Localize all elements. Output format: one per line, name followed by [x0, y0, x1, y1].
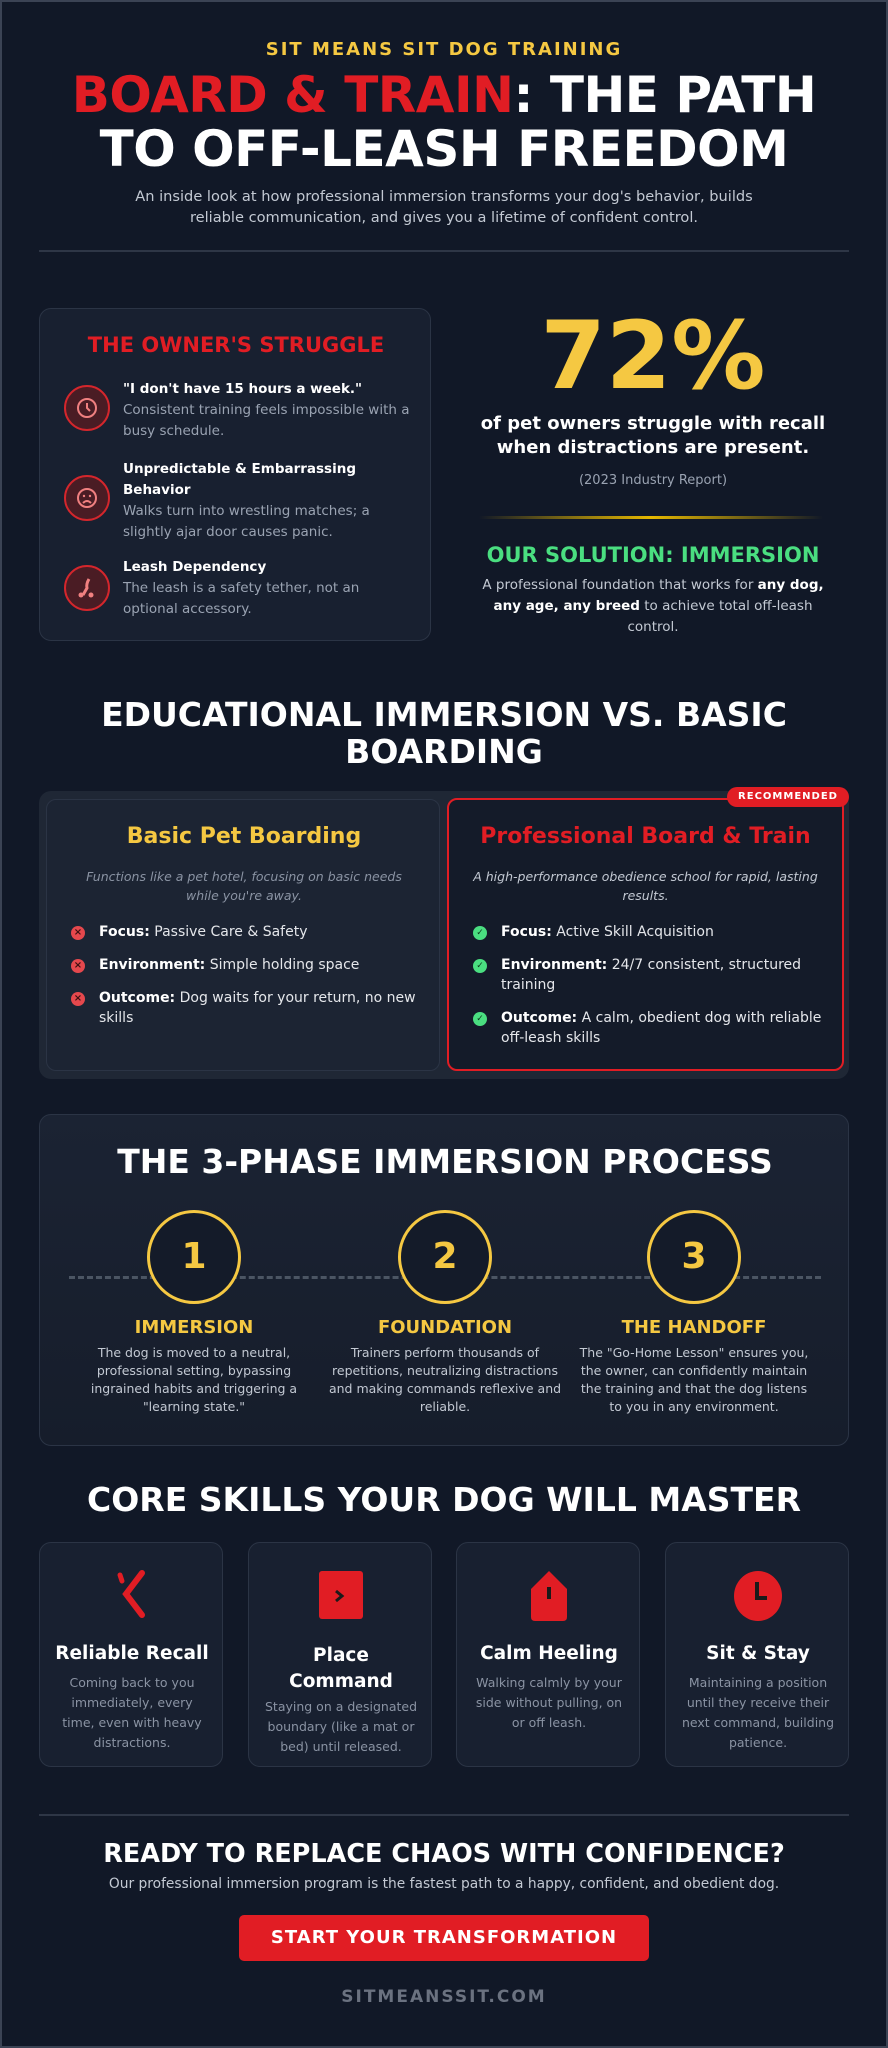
panel: 3-phase process [39, 1114, 849, 1446]
phase 3: THE HANDOFF [622, 1317, 766, 1338]
card: basic boarding: Outcome: Dog waits for your return, no new skills [99, 990, 416, 1026]
icon: leash [64, 565, 110, 611]
card: professional board & train: A high-performance obedience school for rapid, lasting results. [473, 869, 818, 903]
item 1 [64, 381, 410, 439]
badge: recommended [727, 787, 849, 807]
icon: clock [734, 1571, 782, 1621]
process heading: THE 3-PHASE IMMERSION PROCESS [117, 1142, 773, 1181]
card: professional board & train: Professional Board & Train [480, 824, 811, 849]
skill card: sit & stay: Maintaining a position until they receive their next command, building patience. [682, 1675, 834, 1750]
phase 3 [580, 1210, 808, 1414]
phase 1 [91, 1210, 297, 1414]
card: professional board & train: Focus: Active Skill Acquisition [501, 924, 714, 940]
card: professional board & train: ✓ [476, 1014, 484, 1024]
card: basic boarding: × [74, 960, 82, 971]
phase 2: Trainers perform thousands of repetitions, neutralizing distractions and making commands reflexive and reliable. [329, 1345, 561, 1414]
stat: 72%: 72% [540, 302, 766, 411]
icon: clock [64, 385, 110, 431]
skill card: place: Place [313, 1645, 369, 1666]
skill card: heeling: Calm Heeling [480, 1643, 618, 1664]
skill card: recall [39, 1542, 223, 1767]
card: professional board & train: ✓ [476, 928, 484, 938]
panel: comparison [39, 791, 849, 1079]
item 1: "I don't have 15 hours a week." [123, 381, 362, 397]
phase 2: 2 [432, 1236, 458, 1277]
card: basic boarding: × [74, 927, 82, 938]
solution text: A professional foundation that works for any dog, any age, any breed to achieve total off-leash control. [482, 577, 824, 635]
panel: owner's struggle [39, 308, 431, 641]
skill card: recall: Coming back to you immediately, every time, even with heavy distractions. [62, 1675, 202, 1750]
card: basic boarding [46, 799, 440, 1071]
icon: tag [531, 1571, 567, 1621]
item 2: Unpredictable & Embarrassing Behavior [123, 461, 356, 498]
card: basic boarding: Environment: Simple holding space [99, 957, 359, 973]
card: professional board & train: Environment: 24/7 consistent, structured training [501, 957, 801, 993]
phase 2: FOUNDATION [378, 1317, 512, 1338]
skill card: sit & stay: Sit & Stay [706, 1643, 810, 1664]
heading: core skills: CORE SKILLS YOUR DOG WILL MASTER [87, 1480, 801, 1519]
card: basic boarding: × [74, 993, 82, 1004]
card: basic boarding: Functions like a pet hotel, focusing on basic needs while you're away. [86, 869, 402, 903]
CTA text: Our professional immersion program is the fastest path to a happy, confident, and obedient dog. [109, 1876, 779, 1892]
item 2 [64, 461, 370, 540]
phase 3: The "Go-Home Lesson" ensures you, the owner, can confidently maintain the training and that the dog listens to you in any environment. [580, 1345, 808, 1414]
stat caption: of pet owners struggle with recall when distractions are present. [481, 413, 825, 458]
main title [72, 66, 816, 178]
phase 2 [329, 1210, 561, 1414]
skill card: heeling: Walking calmly by your side without pulling, on or off leash. [476, 1675, 622, 1730]
item 2: Walks turn into wrestling matches; a slightly ajar door causes panic. [123, 503, 370, 540]
item 3: Leash Dependency [123, 559, 266, 575]
CTA button: START YOUR TRANSFORMATION [271, 1927, 617, 1948]
header kicker: SIT MEANS SIT DOG TRAINING [266, 39, 622, 60]
main title: BOARD & TRAIN: THE PATH [72, 66, 816, 124]
CTA button [239, 1915, 649, 1961]
item 3: The leash is a safety tether, not an optional accessory. [123, 580, 359, 617]
phase 1: The dog is moved to a neutral, professional setting, bypassing ingrained habits and triggering a "learning state." [91, 1345, 297, 1414]
phase 3: 3 [681, 1236, 707, 1277]
card: professional board & train: ✓ [476, 961, 484, 971]
item 1: Consistent training feels impossible with a busy schedule. [123, 402, 410, 439]
skill card: place: Command [289, 1671, 393, 1692]
skill card: place: Staying on a designated boundary (like a mat or bed) until released. [265, 1699, 417, 1754]
card: basic boarding: Focus: Passive Care & Safety [99, 924, 308, 940]
subtitle: An inside look at how professional immersion transforms your dog's behavior, builds reliable communication, and gives you a lifetime of confident control. [135, 188, 753, 226]
phase 1: IMMERSION [135, 1317, 253, 1338]
stat source: (2023 Industry Report) [579, 473, 727, 488]
item 3 [64, 559, 359, 617]
badge: recommended: RECOMMENDED [738, 791, 838, 802]
skill card: place [248, 1542, 432, 1767]
skill card: sit & stay [665, 1542, 849, 1767]
card: basic boarding: Basic Pet Boarding [127, 824, 361, 849]
icon: sad face [64, 475, 110, 521]
skill card: recall: Reliable Recall [55, 1643, 209, 1664]
icon: place mat [319, 1571, 363, 1619]
struggle heading: THE OWNER'S STRUGGLE [88, 333, 384, 357]
phase 1: 1 [181, 1236, 207, 1277]
main title: TO OFF-LEASH FREEDOM [100, 120, 788, 178]
heading: comparison: EDUCATIONAL IMMERSION VS. BASIC BOARDING [101, 695, 787, 771]
footer url: SITMEANSSIT.COM [341, 1987, 547, 2007]
CTA heading: READY TO REPLACE CHAOS WITH CONFIDENCE? [103, 1839, 785, 1869]
icon: recall arrow [118, 1570, 145, 1618]
card: professional board & train: Outcome: A calm, obedient dog with reliable off-leash skills [501, 1010, 821, 1046]
card: professional board & train [447, 798, 844, 1071]
solution heading: OUR SOLUTION: IMMERSION [487, 543, 819, 567]
skill card: heeling [456, 1542, 640, 1767]
